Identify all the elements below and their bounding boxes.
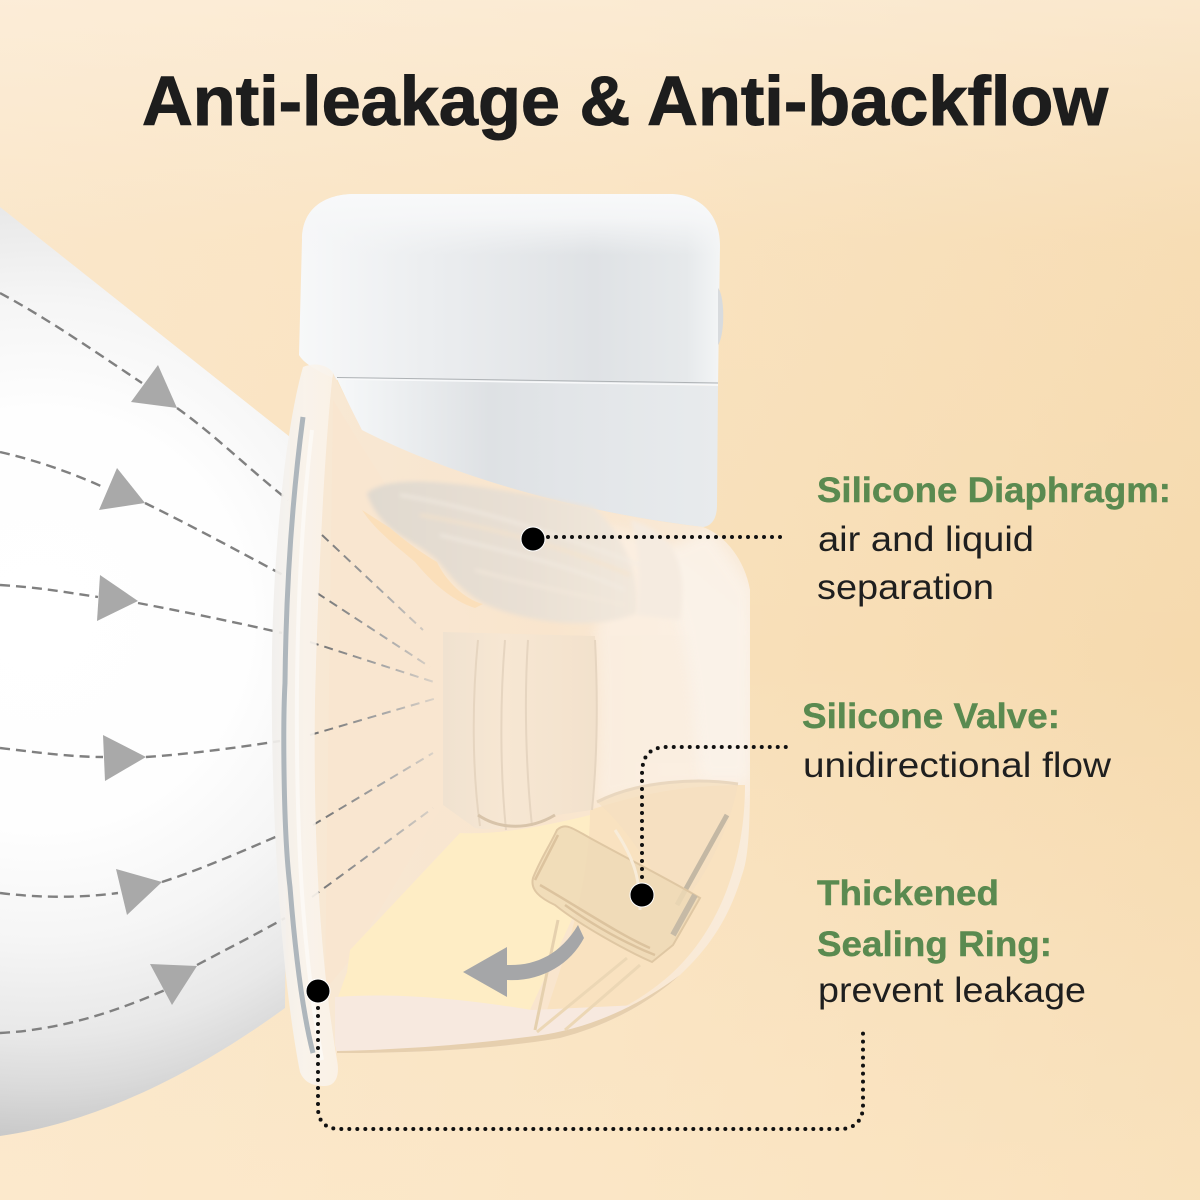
label: thickened sealing ring: Thickened — [817, 874, 999, 913]
funnel shading — [325, 400, 470, 990]
label: silicone valve — [802, 697, 1112, 785]
silicone diaphragm — [362, 481, 683, 623]
pump collector body — [300, 360, 760, 1060]
valve stem — [443, 632, 597, 830]
label: thickened sealing ring: Sealing Ring: — [817, 925, 1052, 964]
title: Anti-leakage & Anti-backflow — [142, 62, 1109, 140]
valve body — [532, 826, 700, 962]
whitish right cup — [596, 530, 697, 798]
milk flow lines on breast — [0, 293, 288, 1033]
label: thickened sealing ring — [817, 874, 1086, 1010]
backflow arrow — [463, 925, 584, 997]
callout dots — [306, 527, 654, 1003]
bright sliver — [362, 510, 483, 608]
silicone valve — [532, 781, 738, 1032]
callout lines — [318, 537, 863, 1129]
right lower tint — [548, 785, 745, 1009]
label: silicone diaphragm: Silicone Diaphragm: — [817, 471, 1171, 510]
label: silicone diaphragm: separation — [817, 568, 994, 607]
label: silicone diaphragm — [817, 471, 1171, 607]
valve flap — [597, 781, 738, 907]
label: silicone valve: Silicone Valve: — [802, 697, 1060, 736]
flow arrowheads — [97, 365, 197, 1005]
motor housing — [299, 194, 723, 527]
breast illustration — [0, 207, 290, 1136]
label: thickened sealing ring: prevent leakage — [818, 971, 1086, 1010]
flange rim — [272, 365, 338, 1086]
milk yellow area — [337, 815, 590, 1010]
funnel dashed lines — [310, 535, 437, 897]
label: silicone diaphragm: air and liquid — [818, 520, 1034, 559]
label: silicone valve: unidirectional flow — [803, 746, 1112, 785]
bottom whitish pool — [335, 995, 640, 1055]
